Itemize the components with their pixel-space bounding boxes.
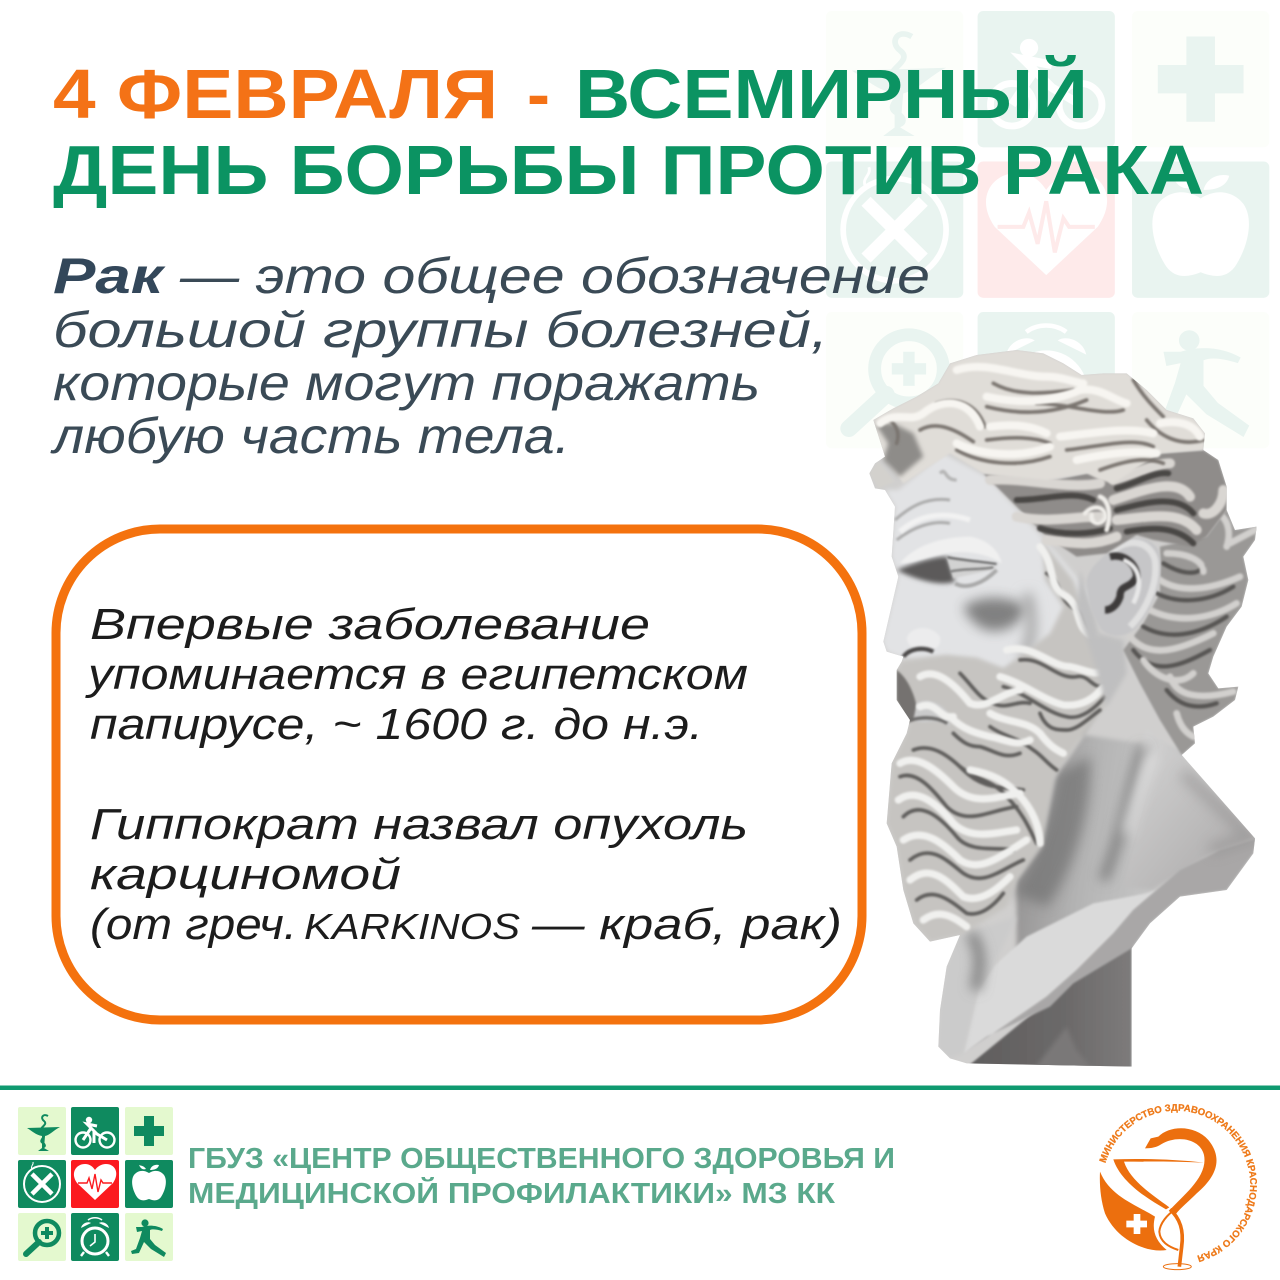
title: ВСЕМИРНЫЙ [575,54,1088,133]
callout text [85,600,842,949]
callout text: упоминается в египетском [85,650,748,699]
face [883,453,1090,670]
callout text: — краб, рак) [531,900,842,949]
panel: history callout [56,529,862,1020]
intro definition text: любую часть тела. [50,408,570,464]
title: - [527,55,550,133]
callout text: папирусе, ~ 1600 г. до н.э. [90,700,703,749]
intro definition text [50,248,930,464]
logo serpent and bowl [1100,1128,1217,1270]
logo circular text: МИНИСТЕРСТВО ЗДРАВООХРАНЕНИЯ КРАСНОДАРСКОГО КРАЯ [1099,1104,1258,1262]
footer icon grid [18,1107,173,1261]
title [53,54,1204,209]
beard mass [887,540,1108,942]
callout text: Впервые заболевание [90,600,650,649]
intro definition text: Рак [53,248,166,304]
marble bust illustration [860,340,1273,1073]
footer divider [0,1086,1280,1090]
callout text: Гиппократ назвал опухоль [90,800,748,849]
ear [1087,538,1161,636]
neck under ear [1077,570,1127,707]
footer organisation name [188,1143,895,1210]
intro definition text: большой группы болезней, [53,302,828,358]
callout text: KARKINOS [304,906,520,947]
top hair [873,350,1205,483]
ministry logo [1099,1104,1258,1270]
back hair [1123,510,1257,755]
title: ДЕНЬ БОРЬБЫ ПРОТИВ РАКА [53,131,1204,209]
middle hair [983,450,1227,557]
callout text: карциномой [90,850,401,899]
intro definition text: которые могут поражать [53,355,760,411]
footer organisation name: ГБУЗ «ЦЕНТР ОБЩЕСТВЕННОГО ЗДОРОВЬЯ И [188,1143,895,1175]
footer organisation name: МЕДИЦИНСКОЙ ПРОФИЛАКТИКИ» МЗ КК [188,1176,835,1210]
intro definition text: — это общее обозначение [179,248,930,304]
callout text: (от греч. [90,900,297,949]
background watermark icon grid [826,11,1269,448]
title date: 4 ФЕВРАЛЯ [53,55,498,133]
logo cross [1126,1214,1147,1234]
